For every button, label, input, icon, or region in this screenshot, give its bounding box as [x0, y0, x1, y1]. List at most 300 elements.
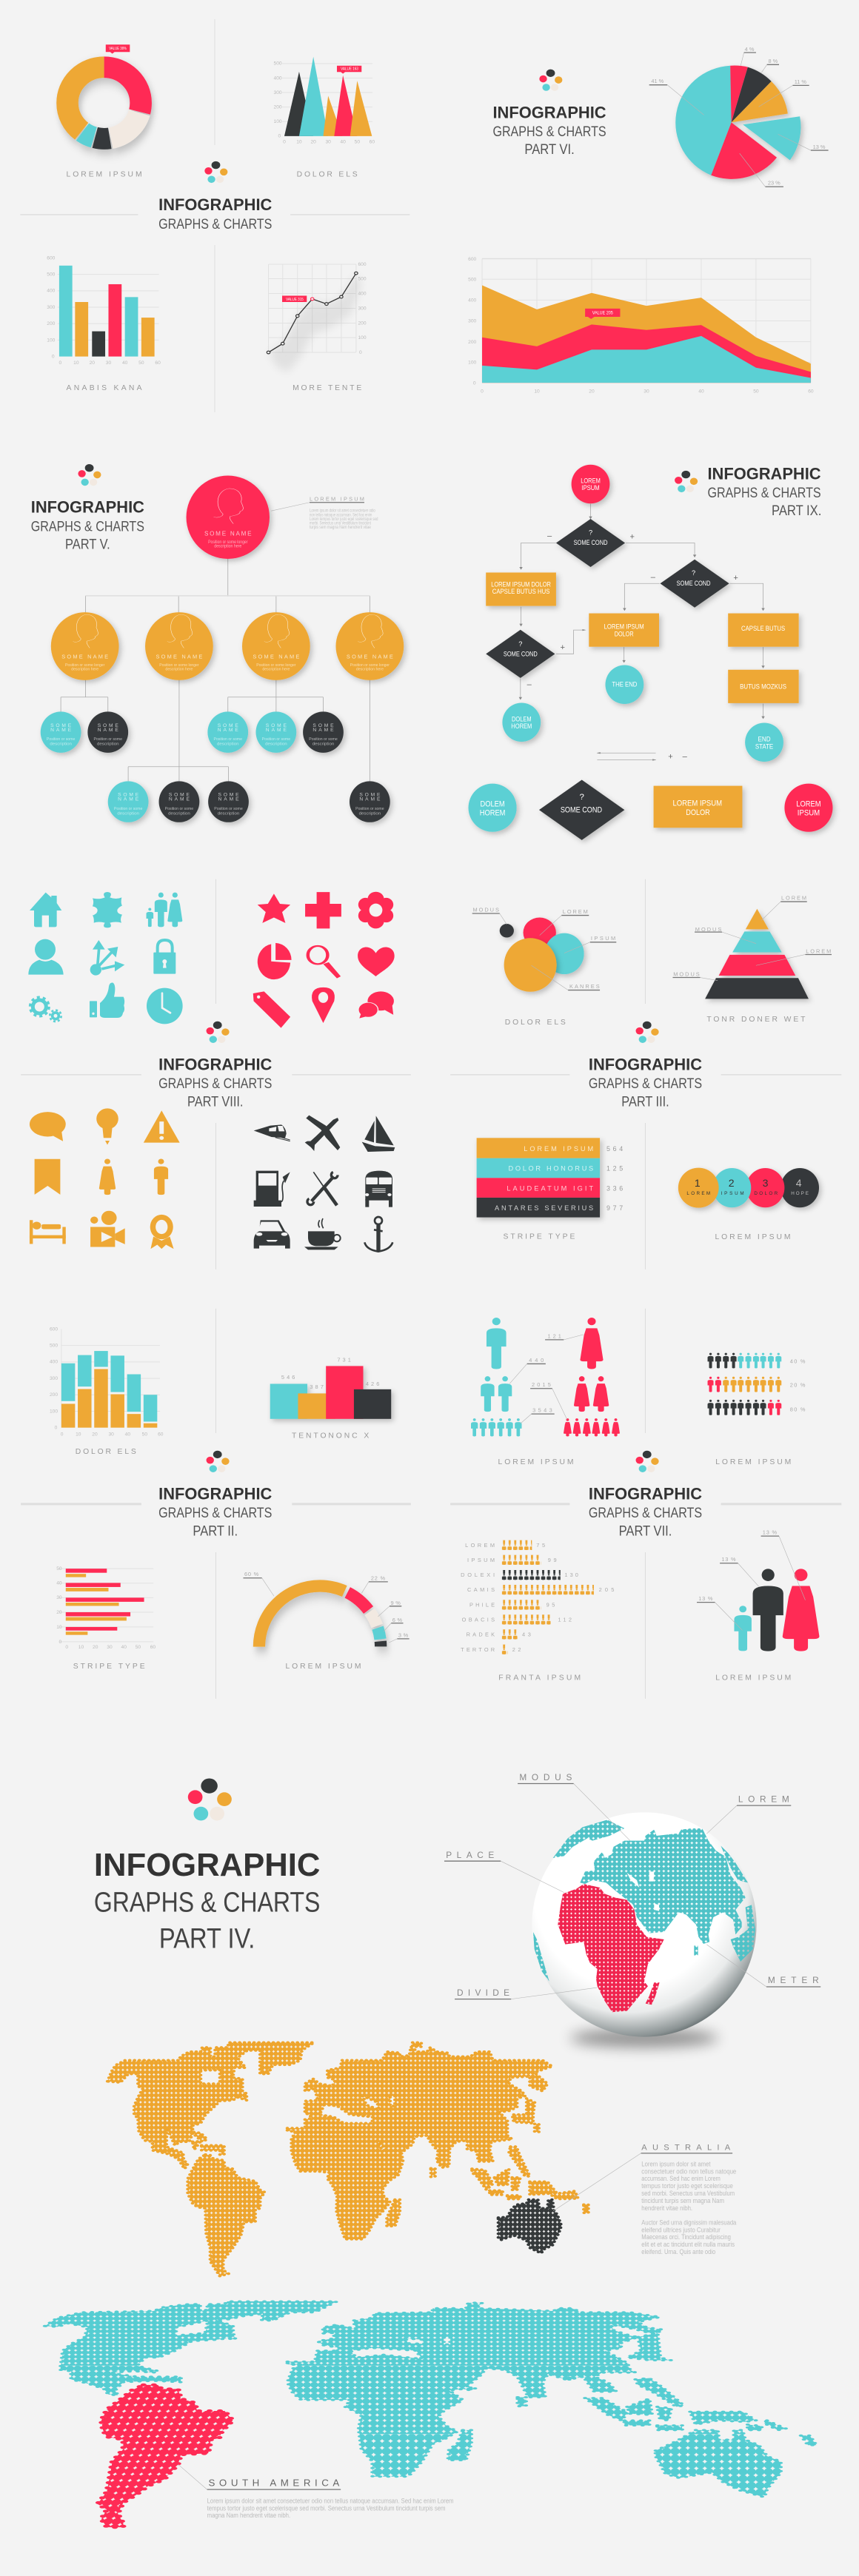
panel: people hierarchy: 440 — [529, 1357, 544, 1364]
panel: bar chart: 100 — [47, 338, 56, 343]
map: teal world map and labels — [45, 2143, 816, 2527]
panel: stacked area chart: VALUE 205 — [592, 311, 613, 316]
legend: dark decision — [539, 779, 624, 840]
panel: line chart: 400 — [358, 291, 367, 296]
heading: part IV: PART IV. — [159, 1922, 255, 1953]
panel: people hierarchy: 2015 — [532, 1381, 551, 1388]
heading: part III: INFOGRAPHIC — [589, 1056, 702, 1074]
node: decision 1: ? — [589, 529, 592, 536]
panel: stripe list: DOLOR HONORUS — [509, 1165, 593, 1173]
node: small teal 2 — [207, 711, 248, 753]
node: decision 2: ? — [692, 569, 695, 577]
node: small dark 4: SOME — [218, 793, 239, 798]
panel: exploded pie chart: 23 % — [768, 180, 781, 187]
panel: percent people rows — [708, 1353, 806, 1466]
panel: globe: DIVIDE — [457, 1988, 509, 1998]
panel: triangle chart: 0 — [283, 139, 286, 144]
panel: flowchart — [469, 465, 832, 840]
icon: video camera — [90, 1211, 125, 1247]
callout: lorem ipsum note: LOREM IPSUM — [310, 496, 364, 503]
panel: semicircle gauge — [243, 1571, 410, 1671]
label: branch minus plus: – — [651, 573, 656, 582]
legend: teal state — [469, 784, 517, 832]
panel: stacked area chart: 20 — [589, 389, 595, 394]
panel: pictogram rows: 95 — [547, 1602, 555, 1609]
panel: line chart: 0 — [359, 350, 362, 355]
section: charts part II and part VII — [21, 1309, 841, 1699]
node: small dark 3: NAME — [169, 797, 190, 802]
legend: orange process: LOREM IPSUM — [672, 799, 722, 808]
icon: clock — [147, 988, 183, 1024]
icon: plane — [305, 1116, 340, 1151]
node: process lorem ipsum dolor — [486, 572, 556, 606]
panel: stacked bars: 100 — [50, 1409, 58, 1414]
label: branch minus plus: – — [527, 680, 532, 689]
node: decision 3 — [486, 630, 555, 678]
panel: overlapping bars — [270, 1357, 391, 1440]
node: small dark 3: SOME — [169, 793, 190, 798]
node: small teal 1: description — [50, 742, 72, 746]
callout: south america: magna Nam hendrerit vitae nibh. — [207, 2512, 290, 2519]
panel: bar chart: ANABIS KANA — [67, 384, 142, 392]
panel: triangle chart: VALUE 163 — [341, 67, 358, 72]
panel: line chart: 500 — [358, 276, 367, 281]
node: small dark 3: description — [168, 811, 190, 816]
panel: numbered circles: 1 — [695, 1177, 701, 1189]
panel: overlapping bars: 546 — [281, 1374, 295, 1381]
callout: australia: elit et et ac tincidunt elit nulla mauris — [641, 2241, 735, 2248]
panel: semicircle gauge: 60 % — [244, 1571, 259, 1577]
node: orange person 1: description here — [71, 668, 99, 672]
panel: horizontal bars: 40 — [56, 1581, 62, 1586]
legend: plus minus: – — [683, 752, 688, 761]
panel: pictogram rows — [461, 1540, 614, 1682]
panel: semicircle gauge: 9 % — [390, 1600, 401, 1606]
panel: bar chart: 300 — [47, 305, 56, 310]
panel: semicircle gauge: 22 % — [371, 1574, 386, 1581]
node: orange person 2: Position or some longer — [159, 663, 199, 668]
node: end state: STATE — [755, 742, 773, 750]
node: small teal 2: SOME — [218, 723, 238, 728]
panel: triangle chart — [274, 57, 375, 179]
node: small teal 3: Position or some — [262, 737, 290, 742]
panel: triangle chart: 30 — [325, 139, 331, 144]
node: orange person 2 — [145, 612, 213, 680]
panel: donut chart: VALUE 38% — [109, 47, 127, 51]
panel: exploded pie chart: 41 % — [651, 78, 664, 84]
icon: family — [147, 893, 182, 927]
panel: org chart — [41, 476, 404, 822]
callout: australia: eleifend. Urna. Quis ante odio — [641, 2248, 715, 2255]
node: small dark 2 — [303, 711, 344, 753]
panel: horizontal bars: 10 — [56, 1625, 62, 1630]
label: branch minus plus: + — [733, 574, 738, 583]
panel: stacked bars: 10 — [76, 1432, 81, 1438]
panel: horizontal bars: 0 — [65, 1645, 68, 1650]
node: small teal 3 — [255, 711, 296, 753]
panel: stacked area chart: 10 — [534, 389, 540, 394]
panel: numbered circles: LOREM — [686, 1191, 710, 1196]
panel: red icons — [253, 892, 395, 1028]
node: process lorem ipsum — [589, 614, 659, 647]
panel: horizontal bars: 50 — [56, 1566, 62, 1572]
node: orange person 3: SOME NAME — [253, 654, 299, 660]
icon: puzzle — [93, 892, 122, 928]
callout: australia: Maecenas orci. Tincidunt adipiscing — [641, 2233, 731, 2241]
callout: australia: Lorem ipsum dolor sit amet — [641, 2161, 711, 2168]
panel: bar chart — [47, 255, 161, 392]
icon: large brand dots — [188, 1779, 232, 1820]
panel: pyramid chart: LOREM — [806, 948, 831, 955]
callout: australia — [553, 2143, 736, 2255]
heading: part VI: PART VI. — [524, 142, 575, 158]
node: small dark 1: SOME — [98, 723, 118, 728]
panel: bubble chart — [472, 906, 616, 1027]
panel: stacked area chart: 0 — [481, 389, 484, 394]
panel: overlapping bars: 426 — [366, 1381, 379, 1387]
node: small teal 2: NAME — [218, 728, 238, 733]
node: top red person: description here — [214, 543, 241, 549]
callout: lorem ipsum note: morbi. Senectus urna Vestibulum tincidunt — [310, 520, 371, 526]
panel: line chart: 300 — [358, 306, 367, 311]
callout: south america: Lorem ipsum dolor sit amet consectetuer odio non tellus natoque accumsan. Sed hac enim Lorem — [207, 2498, 454, 2505]
panel: pictogram rows: LOREM — [465, 1542, 495, 1549]
panel: globe: PLACE — [446, 1850, 494, 1860]
panel: family percentages — [697, 1529, 819, 1682]
label: branch minus plus: + — [561, 643, 565, 652]
panel: teal icons — [28, 892, 183, 1024]
panel: stacked area chart: 30 — [644, 389, 649, 394]
node: end state — [745, 723, 783, 762]
panel: pictogram rows: 75 — [536, 1542, 545, 1549]
node: small dark 1: description — [97, 742, 119, 746]
icon: woman — [99, 1158, 116, 1195]
heading: part II: PART II. — [193, 1523, 238, 1539]
node: small teal 4: Position or some — [114, 807, 142, 811]
node: orange person 1 — [51, 612, 119, 680]
row: 20 percent — [708, 1377, 781, 1392]
node: orange person 3 — [242, 612, 310, 680]
panel: horizontal bars — [56, 1566, 156, 1671]
panel: triangle chart: 400 — [274, 76, 282, 81]
panel: stacked bars: 30 — [108, 1432, 114, 1438]
panel: pyramid chart: TONR DONER WET — [706, 1016, 806, 1024]
heading: part V: PART V. — [65, 537, 110, 552]
node: small teal 1: NAME — [50, 728, 72, 733]
panel: stacked bars: DOLOR ELS — [76, 1448, 136, 1456]
callout: south america — [178, 2464, 454, 2519]
panel: line chart: 200 — [358, 321, 367, 326]
panel: stacked area chart: 300 — [468, 319, 477, 324]
legend: teal state: DOLEM — [480, 799, 505, 808]
node: small dark 4: Position or some — [214, 807, 243, 811]
panel: pyramid chart: MODUS — [695, 926, 721, 933]
region: australia dark dots — [498, 2200, 561, 2253]
heading: part III: PART III. — [621, 1094, 669, 1110]
node: orange person 4: SOME NAME — [347, 654, 393, 660]
icon: anchor — [364, 1217, 392, 1252]
panel: horizontal bars: 10 — [78, 1645, 84, 1650]
panel: horizontal bars: 40 — [121, 1645, 127, 1650]
node: dolem horem: DOLEM — [512, 715, 532, 722]
panel: stacked bars: 0 — [55, 1425, 58, 1430]
panel: numbered circles: DOLOR — [754, 1191, 778, 1196]
panel: donut chart — [67, 44, 142, 179]
panel: line chart: VALUE 315 — [286, 298, 304, 302]
panel: stripe list: STRIPE TYPE — [504, 1232, 575, 1241]
panel: bubble chart: LOREM — [563, 908, 588, 915]
icon: warning — [144, 1110, 180, 1143]
panel: bubble chart: IPSUM — [591, 935, 615, 942]
node: process lorem ipsum: LOREM IPSUM — [604, 623, 644, 631]
node: small dark 4 — [208, 781, 249, 822]
heading: part V: INFOGRAPHIC — [31, 497, 144, 516]
panel: stripe list: 336 — [606, 1184, 623, 1192]
heading: part VIII — [21, 1056, 411, 1110]
icon: speech bubbles — [358, 991, 394, 1019]
icon: brand dots part VIII — [207, 1022, 230, 1043]
panel: bar chart: 0 — [52, 354, 55, 359]
legend: orange process — [654, 786, 742, 828]
legend: red start: LOREM — [796, 799, 821, 808]
icon: map pin — [312, 987, 335, 1023]
panel: dark icons — [254, 1116, 395, 1252]
panel: stacked area chart: 400 — [468, 298, 477, 303]
panel: pyramid chart: LOREM — [781, 894, 806, 901]
panel: bar chart: 60 — [155, 360, 161, 366]
node: process lorem ipsum dolor: CAPSLE BUTUS HUS — [492, 588, 549, 595]
panel: people hierarchy: 3543 — [532, 1407, 552, 1414]
heading: part II: INFOGRAPHIC — [158, 1485, 272, 1503]
node: small dark 5 — [350, 781, 390, 822]
legend: plus minus — [668, 752, 688, 761]
heading: part IX: PART IX. — [772, 503, 821, 519]
panel: numbered circles: IPSUM — [721, 1191, 744, 1196]
panel: stripe list: 125 — [606, 1165, 623, 1173]
panel: triangle chart: 200 — [274, 104, 282, 110]
panel: percent people rows: 40 % — [790, 1358, 806, 1364]
node: orange person 2: SOME NAME — [156, 654, 202, 660]
panel: overlapping bars: 387 — [310, 1383, 324, 1390]
panel: stripe list: LAUDEATUM IGIT — [507, 1184, 594, 1192]
panel: horizontal bars: 30 — [56, 1595, 62, 1600]
panel: stacked area chart: 200 — [468, 340, 477, 345]
callout: south america: SOUTH AMERICA — [208, 2478, 339, 2489]
panel: pictogram rows: 205 — [599, 1586, 614, 1593]
panel: horizontal bars: 20 — [93, 1645, 98, 1650]
node: small dark 2: SOME — [312, 723, 334, 728]
panel: bar chart: 20 — [90, 360, 95, 366]
panel: pictogram rows: FRANTA IPSUM — [498, 1674, 581, 1682]
node: decision 3: ? — [518, 640, 522, 648]
icon: pie — [258, 943, 292, 979]
callout: south america: tempus tortor justo eget scelerisque sed morbi. Senectus urna Vestibulum tincidunt turpis sem — [207, 2505, 445, 2512]
panel: stacked bars: 400 — [50, 1360, 58, 1365]
heading: part VI: INFOGRAPHIC — [492, 103, 606, 121]
icon: lock — [153, 940, 176, 974]
heading: part II — [21, 1485, 411, 1539]
node: small dark 5: NAME — [359, 797, 381, 802]
node: end state: END — [758, 736, 771, 743]
node: process lorem ipsum dolor: LOREM IPSUM DOLOR — [491, 581, 551, 588]
region: eurasia dots on globe — [533, 1819, 755, 1982]
panel: stacked bars: 60 — [158, 1432, 164, 1438]
panel: globe — [444, 1772, 820, 2047]
panel: exploded pie chart: 11 % — [795, 78, 806, 85]
callout: australia: AUSTRALIA — [641, 2143, 731, 2152]
node: start — [572, 465, 609, 503]
node: small dark 1: Position or some — [94, 737, 122, 742]
panel: globe: LOREM — [738, 1794, 789, 1804]
heading: part VII: INFOGRAPHIC — [589, 1485, 702, 1503]
icon: flower — [358, 892, 393, 928]
panel: triangle chart: 50 — [355, 139, 360, 144]
panel: pictogram rows: 43 — [522, 1631, 531, 1638]
panel: horizontal bars: 20 — [56, 1610, 62, 1615]
icon: tag — [253, 991, 290, 1028]
icon: arrows — [90, 940, 124, 976]
node: small dark 1 — [87, 711, 128, 753]
node: small teal 1 — [41, 711, 81, 753]
callout: lorem ipsum note — [310, 496, 378, 530]
panel: triangle chart: 0 — [278, 134, 281, 139]
panel: overlapping bars: 731 — [337, 1357, 351, 1364]
callout: australia: hendrerit vitae nibh. — [641, 2204, 692, 2212]
region: teal dots — [45, 2301, 816, 2497]
heading: part IX — [707, 465, 821, 519]
callout: lorem ipsum note: turpis sem magna Nam hendrerit vitae — [310, 525, 371, 530]
panel: bubble chart: DOLOR ELS — [505, 1019, 566, 1027]
panel: horizontal bars: 0 — [59, 1640, 62, 1645]
panel: stacked bars: 500 — [50, 1344, 58, 1349]
icon: ribbon — [150, 1215, 174, 1249]
node: decision 2: SOME COND — [677, 580, 711, 587]
legend: red start: IPSUM — [798, 809, 820, 818]
panel: pictogram rows: 130 — [564, 1572, 578, 1578]
row: 80 percent — [708, 1400, 781, 1415]
node: small teal 4: SOME — [118, 793, 139, 798]
node: top red person: Position or some longer — [208, 540, 248, 545]
panel: bubble chart: KANRES — [569, 983, 600, 990]
panel: numbered circles — [678, 1168, 819, 1241]
panel: triangle chart: 40 — [340, 139, 346, 144]
heading: part IX: GRAPHS & CHARTS — [707, 486, 821, 501]
panel: pictogram rows: PHILE — [469, 1602, 495, 1609]
label: branch minus plus: – — [547, 532, 552, 541]
node: orange person 3: Position or some longer — [256, 663, 296, 668]
callout: australia: tincidunt turpis sem magna Nam — [641, 2197, 724, 2204]
icon: magnifier — [308, 946, 341, 979]
panel: stacked bars: 40 — [125, 1432, 130, 1438]
node: orange person 1: SOME NAME — [61, 654, 108, 660]
node: small dark 4: description — [218, 811, 239, 816]
panel: stripe list: ANTARES SEVERIUS — [495, 1204, 593, 1212]
callout: australia: sed morbi. Senectus urna Vestibulum — [641, 2190, 735, 2197]
icon: train — [254, 1124, 290, 1141]
panel: stacked bars: 50 — [142, 1432, 147, 1438]
node: orange person 4 — [335, 612, 404, 680]
callout: australia: eleifend ultrices justo Curabitur — [641, 2226, 721, 2233]
heading: part IV: INFOGRAPHIC — [94, 1847, 320, 1883]
heading: part IV: GRAPHS & CHARTS — [94, 1887, 320, 1918]
heading: part VII: GRAPHS & CHARTS — [589, 1506, 702, 1521]
icon: brand dots part VI — [539, 70, 562, 91]
panel: line chart: 600 — [358, 262, 367, 267]
callout: australia: Auctor Sed urna dignissim malesuada — [641, 2218, 736, 2226]
panel: people hierarchy: LOREM IPSUM — [498, 1458, 574, 1466]
node: orange person 2: description here — [165, 668, 193, 672]
panel: stacked area chart — [468, 257, 814, 394]
panel: bar chart: 40 — [122, 360, 128, 366]
node: small teal 2: Position or some — [214, 737, 242, 742]
section: charts part VI and intro — [20, 19, 829, 412]
panel: stacked area chart: 40 — [698, 389, 704, 394]
panel: stripe list: LOREM IPSUM — [524, 1145, 593, 1153]
node: decision 1 — [556, 519, 625, 567]
panel: stacked area chart: 500 — [468, 278, 477, 283]
node: orange person 3: description here — [262, 668, 290, 672]
panel: line chart: MORE TENTE — [293, 384, 361, 392]
node: process butus mozkus: BUTUS MOZKUS — [740, 683, 786, 691]
node: process butus mozkus — [728, 670, 799, 703]
heading: graphs and charts: INFOGRAPHIC — [158, 195, 272, 214]
heading: part II: GRAPHS & CHARTS — [158, 1506, 272, 1521]
panel: stacked area chart: 100 — [468, 360, 477, 366]
panel: triangle chart: DOLOR ELS — [297, 171, 358, 179]
icon: brand dots part IX — [675, 471, 698, 492]
panel: bar chart: 600 — [47, 255, 56, 261]
heading: part III: GRAPHS & CHARTS — [589, 1076, 702, 1092]
node: orange person 1: Position or some longer — [65, 663, 104, 668]
callout: lorem ipsum note: Lorem ipsum dolor sit amet consectetuer odio — [310, 509, 375, 514]
node: the end: THE END — [612, 680, 638, 688]
node: dolem horem: HOREM — [511, 722, 532, 730]
node: process capsle butus: CAPSLE BUTUS — [741, 625, 785, 632]
callout: lorem ipsum note: non tellus natoque accumsan. Sed hac enim — [310, 512, 372, 517]
icon: gears — [30, 997, 61, 1022]
panel: numbered circles: LOREM IPSUM — [715, 1233, 791, 1241]
legend: orange process: DOLOR — [686, 808, 710, 817]
node: top red person: SOME NAME — [204, 531, 252, 537]
panel: numbered circles: 2 — [729, 1177, 735, 1189]
panel: stacked area chart: 600 — [468, 257, 477, 262]
node: orange person 4: description here — [356, 668, 384, 672]
panel: semicircle gauge: 3 % — [398, 1632, 409, 1639]
node: small dark 2: description — [312, 742, 334, 746]
panel: bar chart: 30 — [106, 360, 111, 366]
legend: red start — [784, 784, 832, 832]
node: small dark 2: Position or some — [309, 737, 338, 742]
node: small teal 3: SOME — [266, 723, 287, 728]
panel: stripe list: 977 — [606, 1204, 623, 1212]
callout: australia: accumsan. Sed hac enim Lorem — [641, 2175, 721, 2182]
panel: stacked area chart: 0 — [473, 380, 476, 386]
node: small teal 1: SOME — [50, 723, 72, 728]
panel: bar chart: 500 — [47, 272, 56, 277]
heading: part V: GRAPHS & CHARTS — [31, 520, 144, 535]
panel: pictogram rows: IPSUM — [467, 1557, 495, 1563]
panel: stripe list: 564 — [606, 1145, 623, 1153]
panel: stacked area chart: 60 — [808, 389, 814, 394]
panel: percent people rows: LOREM IPSUM — [715, 1458, 791, 1466]
panel: people hierarchy — [471, 1318, 620, 1466]
panel: pictogram rows: RADEK — [467, 1631, 495, 1638]
icon: star — [258, 893, 290, 923]
icon: chat bubble — [30, 1112, 66, 1141]
node: decision 1: SOME COND — [574, 539, 607, 546]
icon: light bulb — [96, 1108, 118, 1145]
node: dolem horem — [502, 703, 541, 742]
